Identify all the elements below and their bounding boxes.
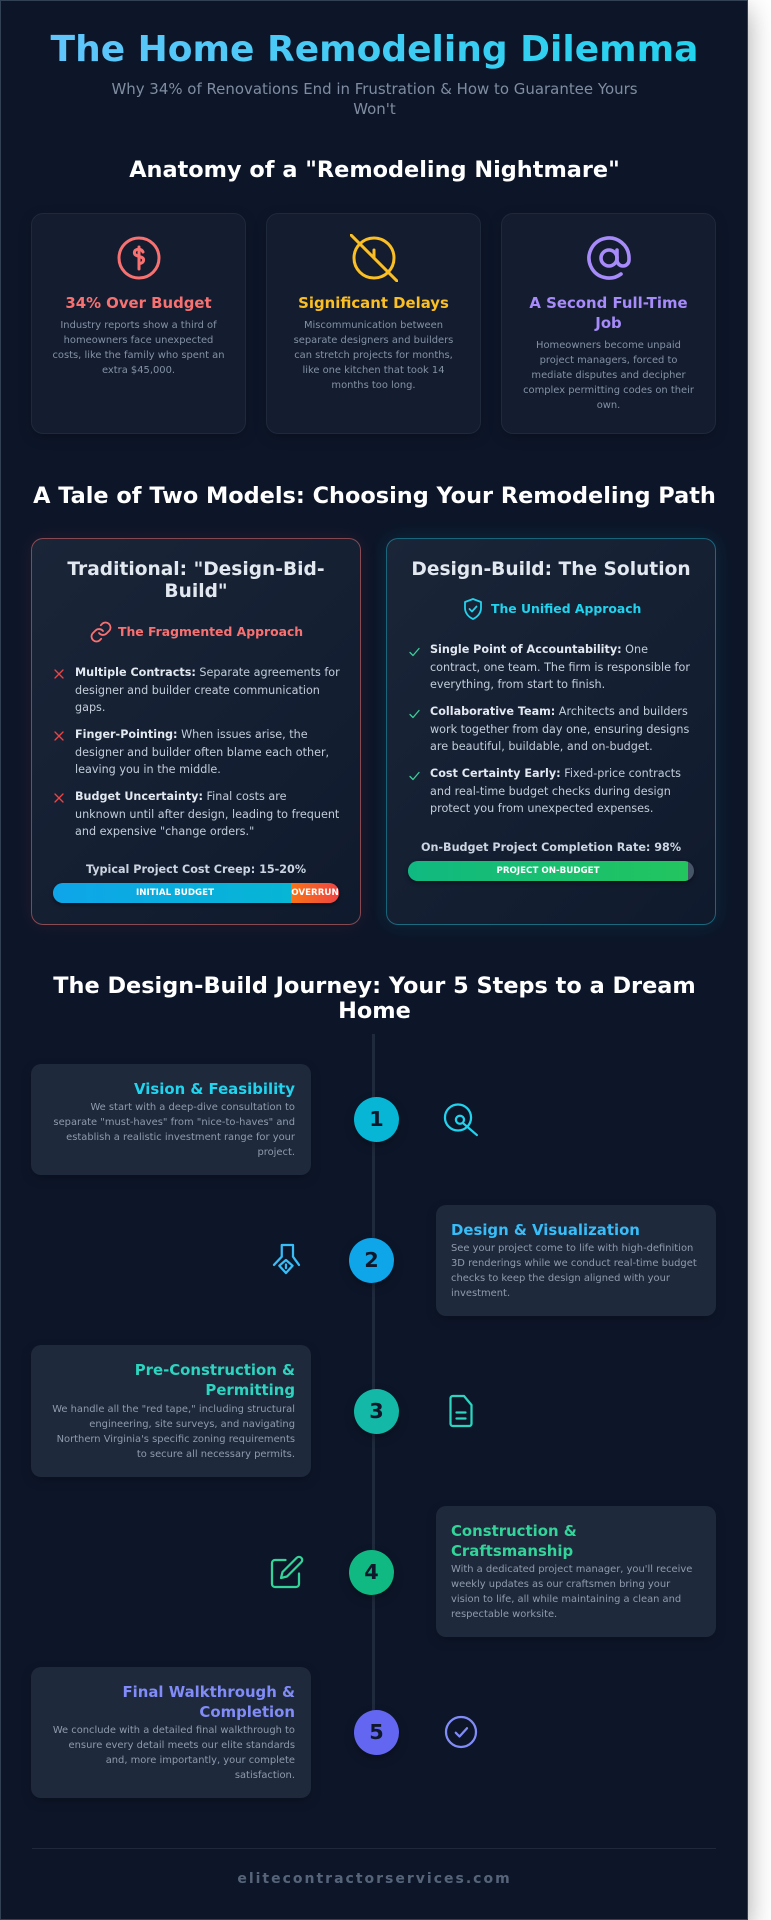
icon: document <box>449 1394 473 1428</box>
card text: mediate disputes and decipher <box>531 370 686 381</box>
list item: designer and builder often blame each other, <box>75 746 329 758</box>
list item: Multiple Contracts: Separate agreements for <box>75 666 340 679</box>
list item <box>75 728 329 776</box>
footer divider <box>32 1848 716 1849</box>
card text: separate designers and builders <box>294 335 453 346</box>
list item: contract, one team. The firm is responsible for <box>430 660 690 674</box>
card text: can stretch projects for months, <box>294 350 453 361</box>
step text: to secure all necessary permits. <box>137 1449 295 1460</box>
step text <box>53 1725 295 1781</box>
list item: work together from day one, ensuring designs <box>430 722 689 736</box>
step text: vision to life, all while maintaining a clean and <box>451 1594 681 1605</box>
subheading: The Unified Approach <box>491 601 641 616</box>
step 3 number <box>354 1389 399 1434</box>
step text: engineering, site surveys, and navigating <box>89 1419 295 1430</box>
card heading: Significant Delays <box>298 294 449 312</box>
icon: at sign <box>587 236 631 280</box>
bar chart: on budget <box>408 861 694 881</box>
icon: chain link <box>90 622 112 642</box>
timeline line <box>372 1034 375 1711</box>
step heading: Final Walkthrough & <box>122 1683 295 1701</box>
heading: journey <box>53 973 696 1024</box>
card text: Miscommunication between <box>304 320 443 331</box>
list item <box>75 790 339 838</box>
bar: overrun: OVERRUN <box>291 888 339 898</box>
list item <box>75 666 340 714</box>
card text <box>523 340 694 411</box>
list item: Cost Certainty Early: Fixed-price contracts <box>430 767 681 780</box>
card heading: 34% Over Budget <box>65 294 212 312</box>
list item: and real-time budget checks during design <box>430 784 671 798</box>
step text: separate "must-haves" from "nice-to-haves" and <box>53 1117 295 1128</box>
step 4 number <box>349 1550 394 1595</box>
card text: months too long. <box>331 380 416 391</box>
chart caption: Typical Project Cost Creep: 15-20% <box>86 863 306 876</box>
heading: journey: The Design-Build Journey: Your 5 Steps to a Dream <box>53 973 696 999</box>
marker: check <box>409 772 420 780</box>
panel: second job <box>501 213 716 434</box>
step heading: Craftsmanship <box>451 1542 573 1560</box>
panel title <box>67 559 325 602</box>
step heading: Design & Visualization <box>451 1221 640 1239</box>
bar: on budget <box>408 861 688 881</box>
card text <box>52 320 225 376</box>
list item: Finger-Pointing: When issues arise, the <box>75 728 308 741</box>
step text: investment. <box>451 1288 510 1299</box>
list item <box>430 643 690 691</box>
list item <box>430 705 689 753</box>
step heading: Vision & Feasibility <box>134 1080 295 1098</box>
list item: gaps. <box>75 701 105 714</box>
card text: Homeowners become unpaid <box>536 340 681 351</box>
step 2 card <box>436 1205 716 1316</box>
step 3 number: 3 <box>369 1399 384 1423</box>
step 5 number: 5 <box>369 1720 384 1744</box>
list item: Budget Uncertainty: Final costs are <box>75 790 287 803</box>
marker: cross <box>54 793 64 803</box>
step text: establish a realistic investment range for your <box>66 1132 295 1143</box>
subheading: The Fragmented Approach <box>118 624 303 639</box>
step text <box>451 1564 692 1620</box>
bar chart: cost creep <box>53 883 339 903</box>
card heading <box>529 294 688 332</box>
step text: checks to keep the design aligned with your <box>451 1273 670 1284</box>
card text: own. <box>597 400 620 411</box>
step 1 number: 1 <box>369 1107 384 1131</box>
step heading <box>451 1522 577 1560</box>
list item <box>430 767 681 815</box>
step 3 card <box>31 1345 311 1477</box>
step text <box>52 1404 295 1460</box>
list item: Single Point of Accountability: One <box>430 643 648 656</box>
marker: cross <box>54 669 64 679</box>
marker: cross <box>54 731 64 741</box>
bar: initial budget <box>53 883 291 903</box>
step heading: Construction & <box>451 1522 577 1540</box>
card text: costs, like the family who spent an <box>52 350 225 361</box>
list item: Collaborative Team: Architects and builders <box>430 705 688 718</box>
card text <box>294 320 453 391</box>
step text: Northern Virginia's specific zoning requirements <box>57 1434 295 1445</box>
chart caption: On-Budget Project Completion Rate: 98% <box>421 841 681 854</box>
panel: traditional <box>31 538 361 925</box>
step 1 card <box>31 1064 311 1175</box>
step text: satisfaction. <box>235 1770 295 1781</box>
list item: are beautiful, buildable, and on-budget. <box>430 740 653 753</box>
step text: respectable worksite. <box>451 1609 557 1620</box>
step text: project. <box>257 1147 295 1158</box>
heading: two models: A Tale of Two Models: Choosing Your Remodeling Path <box>33 483 716 509</box>
subtitle: Won't <box>353 100 396 118</box>
step text: With a dedicated project manager, you'll receive <box>451 1564 692 1575</box>
step heading: Pre-Construction & <box>135 1361 295 1379</box>
step 4 card <box>436 1506 716 1637</box>
list item: unknown until after design, leading to frequent <box>75 808 339 820</box>
panel: design-build <box>386 538 716 925</box>
step text: and, more importantly, your complete <box>106 1755 295 1766</box>
title: The Home Remodeling Dilemma <box>51 29 698 70</box>
card text: project managers, forced to <box>540 355 677 366</box>
bar: initial budget: INITIAL BUDGET <box>136 888 214 898</box>
step 4 number: 4 <box>364 1560 379 1584</box>
card text: extra $45,000. <box>102 365 175 376</box>
heading: journey: Home <box>338 998 411 1024</box>
icon: pen tool <box>272 1244 300 1274</box>
panel title: Build" <box>164 581 228 602</box>
list item: everything, from start to finish. <box>430 678 605 691</box>
step text: We start with a deep-dive consultation to <box>90 1102 295 1113</box>
step text: 3D renderings while we conduct real-time budget <box>451 1258 697 1269</box>
icon: search <box>444 1103 478 1136</box>
icon: dollar circle <box>118 236 160 280</box>
step text: weekly updates as our craftsmen bring your <box>451 1579 670 1590</box>
panel title: Design-Build: The Solution <box>411 559 691 580</box>
marker: check <box>409 648 420 656</box>
list item: leaving you in the middle. <box>75 763 221 776</box>
list item: and expensive "change orders." <box>75 825 254 838</box>
step text: ensure every detail meets our elite standards <box>69 1740 295 1751</box>
step 5 number <box>354 1710 399 1755</box>
step heading: Permitting <box>205 1381 295 1399</box>
step heading <box>122 1683 295 1721</box>
bar: overrun <box>291 883 339 903</box>
heading: anatomy: Anatomy of a "Remodeling Nightmare" <box>129 157 620 183</box>
step text <box>451 1243 697 1299</box>
card text: Industry reports show a third of <box>60 320 217 331</box>
icon: check circle <box>444 1716 478 1748</box>
icon: edit <box>270 1556 304 1588</box>
step 2 number: 2 <box>364 1248 379 1272</box>
subtitle: Why 34% of Renovations End in Frustration & How to Guarantee Yours <box>111 80 638 98</box>
card heading: A Second Full-Time <box>529 294 688 312</box>
card text: homeowners face unexpected <box>64 335 213 346</box>
panel title: Traditional: "Design-Bid- <box>67 559 325 580</box>
card text: like one kitchen that took 14 <box>302 365 445 376</box>
step 5 card <box>31 1667 311 1798</box>
card text: complex permitting codes on their <box>523 385 694 396</box>
step heading: Completion <box>199 1703 295 1721</box>
marker: check <box>409 710 420 718</box>
list item: protect you from unexpected expenses. <box>430 802 653 815</box>
icon: shield check <box>464 598 482 620</box>
panel: delays <box>266 213 481 434</box>
card heading: Job <box>595 314 622 332</box>
icon: crossed clock <box>350 234 398 282</box>
subtitle <box>111 80 638 118</box>
step text <box>53 1102 295 1158</box>
list item: designer and builder create communication <box>75 684 320 696</box>
step text: See your project come to life with high-definition <box>451 1243 693 1254</box>
step 1 number <box>354 1097 399 1142</box>
footer: elitecontractorservices.com <box>237 1871 512 1887</box>
step heading <box>135 1361 295 1399</box>
step text: We conclude with a detailed final walkthrough to <box>53 1725 295 1736</box>
step text: We handle all the "red tape," including structural <box>52 1404 295 1415</box>
panel: over budget <box>31 213 246 434</box>
step 2 number <box>349 1238 394 1283</box>
bar: on budget: PROJECT ON-BUDGET <box>496 866 600 876</box>
